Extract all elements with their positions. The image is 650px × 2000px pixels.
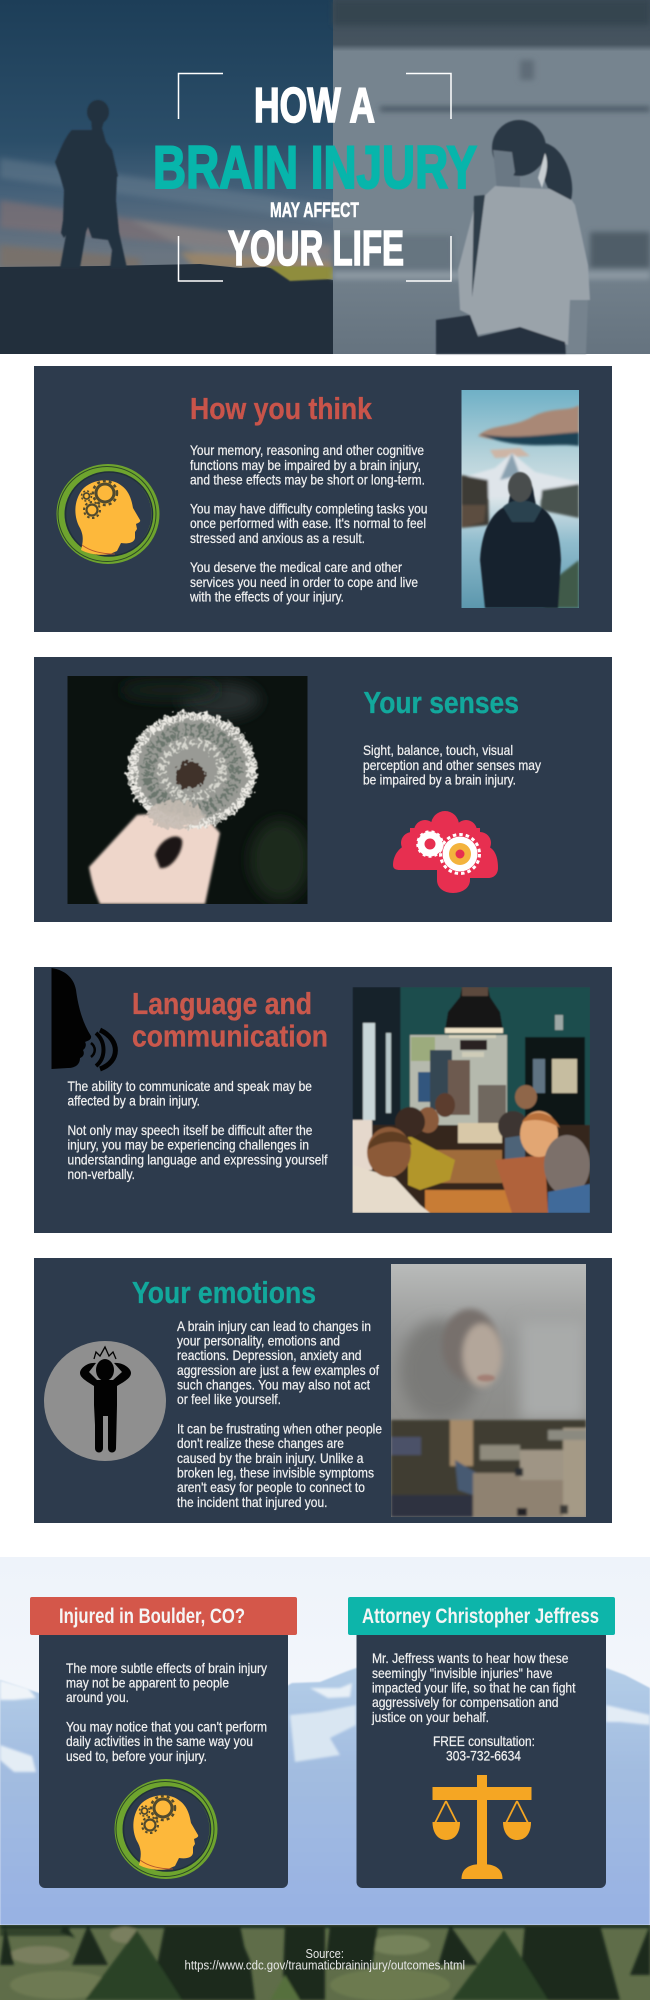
text block: how you think: services you need in order to cope and live xyxy=(190,575,418,590)
text block: language: understanding language and expressing yourself xyxy=(68,1152,328,1168)
icon: brain cloud with gears xyxy=(393,811,498,893)
text block: how you think: You deserve the medical care and other xyxy=(190,560,402,575)
icon: scales of justice xyxy=(432,1775,532,1879)
text block: how you think: with the effects of your injury. xyxy=(189,590,344,604)
text block: your emotions: or feel like yourself. xyxy=(177,1392,281,1407)
heading: your senses: Your senses xyxy=(364,685,519,720)
left photo: man silhouette at sunset xyxy=(0,0,333,354)
text block: subtle effects: around you. xyxy=(66,1690,129,1705)
card header xyxy=(30,1597,297,1635)
text block: how you think: functions may be impaired by a brain injury, xyxy=(190,458,421,473)
text block: language: affected by a brain injury. xyxy=(68,1094,200,1108)
text block: your senses: Sight, balance, touch, visual xyxy=(363,743,513,758)
text block: your emotions: broken leg, these invisible symptoms xyxy=(177,1466,374,1480)
text block: attorney: Mr. Jeffress wants to hear how these xyxy=(372,1651,568,1666)
text block: your senses: be impaired by a brain injury. xyxy=(363,772,516,788)
photo: hand holding dandelion xyxy=(68,676,310,904)
card: attorney xyxy=(348,1597,615,1888)
text block: your senses: perception and other senses may xyxy=(363,758,541,773)
text block: your emotions: don't realize these changes are xyxy=(177,1436,344,1451)
photo: restaurant xyxy=(352,987,590,1213)
card: injured in Boulder xyxy=(30,1597,297,1888)
text block: language: The ability to communicate and speak may be xyxy=(68,1079,312,1094)
text block: how you think: once performed with ease. It's normal to feel xyxy=(190,516,426,531)
text block: your emotions: the incident that injured you. xyxy=(177,1495,328,1510)
text block: attorney: aggressively for compensation and xyxy=(372,1695,558,1710)
icon: head with gears xyxy=(58,466,156,562)
title frame xyxy=(178,74,451,281)
bottom mountain background xyxy=(0,1557,650,1925)
text block: your emotions: your personality, emotions and xyxy=(177,1334,340,1348)
text block: language xyxy=(68,1079,328,1182)
text block: how you think: Your memory, reasoning and other cognitive xyxy=(190,443,424,458)
text block: free consultation: FREE consultation: xyxy=(433,1734,535,1749)
text block: how you think xyxy=(189,443,428,604)
text block: attorney: impacted your life, so that he can fight xyxy=(372,1680,576,1696)
text block: your emotions: such changes. You may also not act xyxy=(177,1378,370,1392)
text block: subtle effects: The more subtle effects of brain injury xyxy=(66,1661,267,1676)
text block: language: non-verbally. xyxy=(68,1167,135,1182)
text block: your emotions xyxy=(177,1319,382,1510)
panel: how you think xyxy=(34,366,612,632)
photo: person facing mountain lake xyxy=(461,390,579,608)
text block: attorney: seemingly "invisible injuries" have xyxy=(372,1666,552,1681)
text block: free consultation xyxy=(433,1734,535,1764)
heading: your emotions: Your emotions xyxy=(132,1275,316,1310)
text block: your emotions: reactions. Depression, anxiety and xyxy=(177,1348,362,1363)
text block: subtle effects: used to, before your injury. xyxy=(66,1749,207,1764)
text block: your emotions: It can be frustrating when other people xyxy=(177,1422,382,1436)
card body xyxy=(356,1630,606,1888)
icon: stressed person xyxy=(44,1341,166,1461)
title xyxy=(153,79,477,276)
icon: speaking face xyxy=(52,968,115,1069)
card header xyxy=(348,1597,615,1635)
header banner xyxy=(0,0,650,354)
text block: your emotions: aren't easy for people to connect to xyxy=(177,1480,365,1495)
text block: your senses xyxy=(363,743,541,788)
icon: head with gears xyxy=(116,1782,214,1876)
text block: subtle effects: You may notice that you can't perform xyxy=(66,1720,267,1734)
text block: language: injury, you may be experiencing challenges in xyxy=(68,1138,309,1152)
source note xyxy=(184,1947,465,1972)
text block: your emotions: caused by the brain injury. Unlike a xyxy=(177,1451,364,1466)
panel: your senses xyxy=(34,657,612,922)
text block: free consultation: 303-732-6634 xyxy=(446,1748,521,1764)
text block: how you think: and these effects may be short or long-term. xyxy=(190,472,425,488)
title: BRAIN INJURY xyxy=(153,134,477,201)
text block: subtle effects xyxy=(66,1661,267,1764)
source note: Source: xyxy=(306,1947,344,1961)
text block: how you think: You may have difficulty completing tasks you xyxy=(190,502,428,516)
heading: language and communication xyxy=(132,986,328,1054)
text block: attorney xyxy=(371,1651,576,1725)
title: HOW A xyxy=(254,79,375,133)
text block: language: Not only may speech itself be difficult after the xyxy=(68,1123,312,1138)
title: YOUR LIFE xyxy=(228,222,404,276)
text block: subtle effects: daily activities in the same way you xyxy=(66,1734,253,1749)
heading: language and communication: communication xyxy=(132,1018,328,1054)
text block: your emotions: aggression are just a few examples of xyxy=(177,1363,379,1378)
text block: your emotions: A brain injury can lead to changes in xyxy=(177,1319,371,1334)
footer forest xyxy=(0,1925,650,2000)
title: MAY AFFECT xyxy=(270,199,359,222)
text block: attorney: justice on your behalf. xyxy=(371,1710,489,1725)
panel: your emotions xyxy=(34,1258,612,1523)
card header: Injured in Boulder, CO? xyxy=(59,1605,245,1628)
text block: subtle effects: may not be apparent to people xyxy=(66,1676,229,1690)
card body xyxy=(39,1630,288,1888)
source note: https://www.cdc.gov/traumaticbraininjury/outcomes.html xyxy=(184,1958,465,1972)
text block: how you think: stressed and anxious as a result. xyxy=(190,531,365,546)
photo: woman behind rainy window xyxy=(391,1264,586,1517)
heading: how you think: How you think xyxy=(190,391,373,426)
right photo: woman in station xyxy=(333,0,650,354)
panel: language and communication xyxy=(34,967,612,1233)
heading: language and communication: Language and xyxy=(132,986,312,1021)
